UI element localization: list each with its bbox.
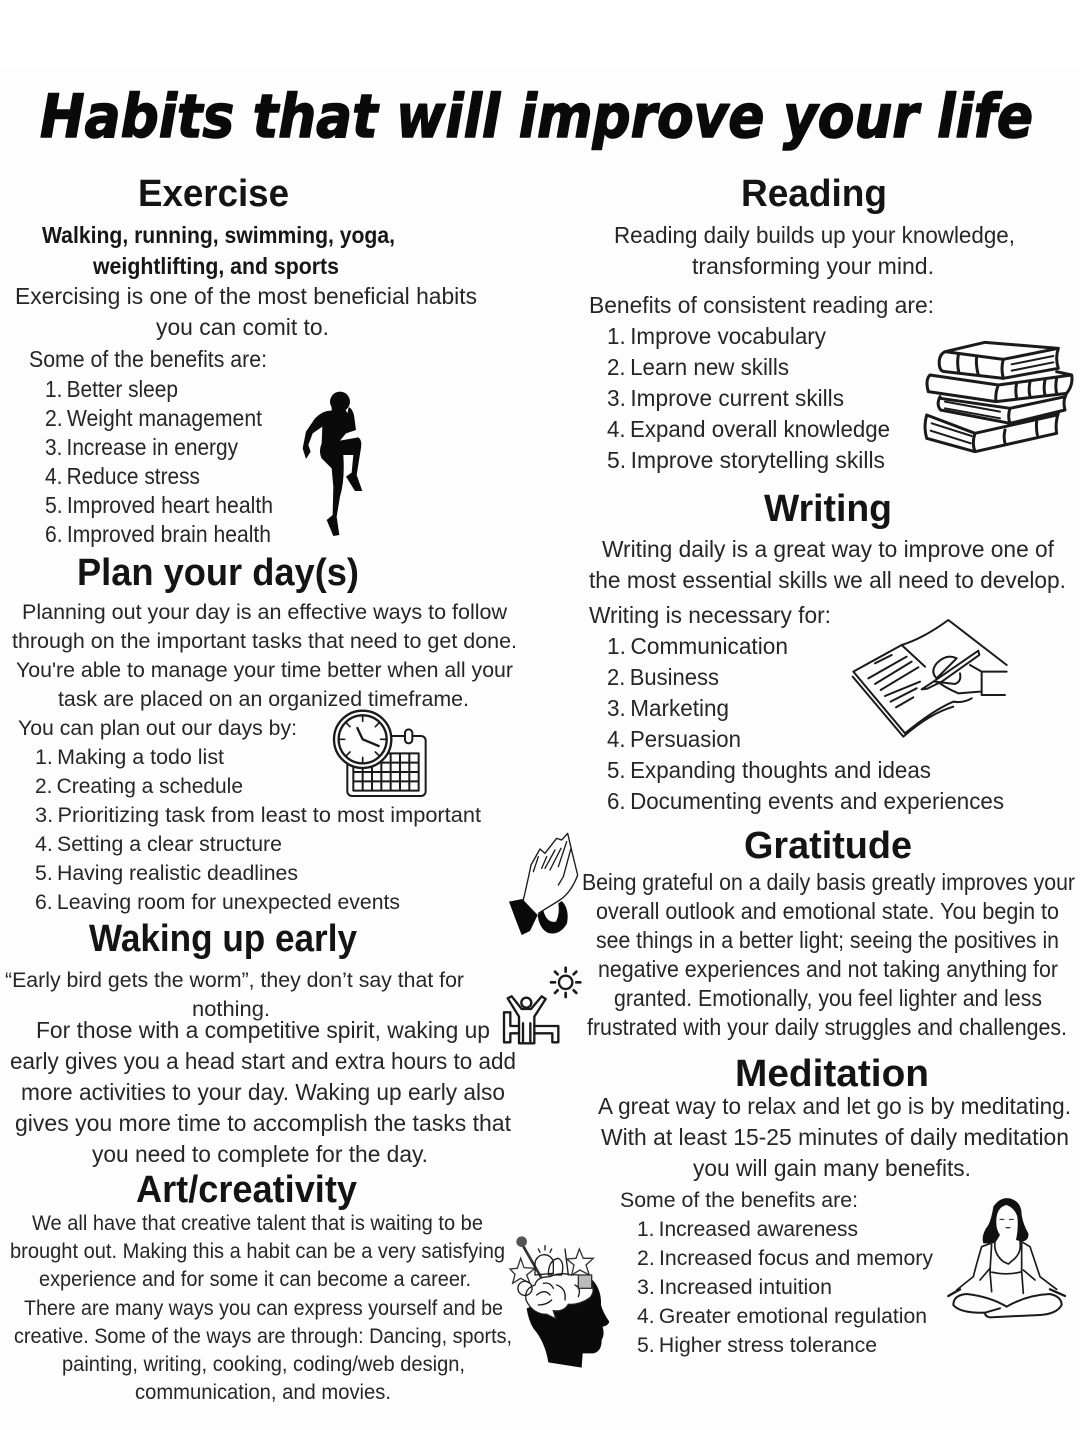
- list: ways to plan: 3. Prioritizing task from least to most important: [35, 804, 481, 827]
- text block: planning intro: Planning out your day is an effective ways to follow: [22, 601, 508, 624]
- list: meditation benefits: 4. Greater emotional regulation: [637, 1305, 927, 1328]
- text block: exercise intro: you can comit to.: [156, 314, 329, 340]
- list: exercise benefits: 6. Improved brain health: [45, 521, 271, 547]
- list: reading benefits: 1. Improve vocabulary: [607, 323, 826, 349]
- icon: sun and person waking in bed: [504, 968, 580, 1043]
- list: reading benefits: 3. Improve current skills: [607, 385, 844, 411]
- icon: praying hands: [509, 833, 578, 935]
- panel: waking up early: [5, 918, 580, 1167]
- icon: runner silhouette: [303, 392, 362, 536]
- icon: stack of books: [925, 342, 1072, 452]
- icon: clock and calendar: [334, 711, 426, 796]
- list: writing uses: 3. Marketing: [607, 695, 729, 721]
- list: ways to plan: 4. Setting a clear structure: [35, 833, 282, 856]
- text block: waking up benefits: more activities to your day. Waking up early also: [21, 1079, 505, 1105]
- list: writing uses: 6. Documenting events and experiences: [607, 788, 1004, 814]
- icon: hand writing in book: [853, 620, 1007, 737]
- text block: meditation intro: With at least 15-25 minutes of daily meditation: [601, 1124, 1069, 1150]
- text block: waking up benefits: For those with a competitive spirit, waking up: [36, 1017, 490, 1043]
- text block: gratitude: overall outlook and emotional state. You begin to: [596, 898, 1059, 924]
- text block: creativity: experience and for some it can become a career.: [39, 1268, 471, 1291]
- list: exercise benefits: 1. Better sleep: [45, 376, 178, 402]
- text block: waking up benefits: early gives you a head start and extra hours to add: [10, 1048, 516, 1074]
- icon: meditating woman: [948, 1198, 1065, 1317]
- list: writing uses: 1. Communication: [607, 633, 788, 659]
- list: reading benefits: [589, 292, 934, 473]
- list: meditation benefits: Some of the benefits are:: [620, 1189, 858, 1212]
- list: meditation benefits: 2. Increased focus and memory: [637, 1247, 934, 1270]
- list: exercise benefits: 3. Increase in energy: [45, 434, 238, 460]
- text block: reading intro: Reading daily builds up your knowledge,: [614, 222, 1015, 248]
- text block: creativity: There are many ways you can express yourself and be: [24, 1297, 503, 1320]
- icon: head with creative brain: [510, 1236, 609, 1368]
- list: ways to plan: [18, 717, 481, 914]
- text block: creativity: creative. Some of the ways are through: Dancing, sports,: [14, 1325, 512, 1348]
- heading: gratitude: Gratitude: [744, 825, 912, 867]
- text block: exercise intro: [15, 222, 477, 340]
- list: meditation benefits: 1. Increased awareness: [637, 1218, 858, 1241]
- list: ways to plan: 2. Creating a schedule: [35, 775, 243, 798]
- panel: reading: [589, 173, 1072, 473]
- text block: reading intro: [614, 222, 1015, 279]
- list: ways to plan: 6. Leaving room for unexpected events: [35, 891, 400, 914]
- text block: waking up benefits: [10, 1017, 516, 1167]
- panel: art and creativity: [10, 1169, 609, 1404]
- text block: creativity: communication, and movies.: [135, 1381, 391, 1404]
- list: meditation benefits: 5. Higher stress tolerance: [637, 1334, 877, 1357]
- text block: early bird quote: nothing.: [192, 998, 270, 1021]
- list: exercise benefits: 4. Reduce stress: [45, 463, 200, 489]
- text block: gratitude: [582, 869, 1075, 1040]
- list: exercise benefits: Some of the benefits are:: [29, 346, 267, 372]
- text block: planning intro: [12, 601, 517, 711]
- list: ways to plan: You can plan out our days by:: [18, 717, 297, 740]
- list: exercise benefits: 2. Weight management: [45, 405, 263, 431]
- text block: creativity: [10, 1212, 512, 1404]
- text block: planning intro: task are placed on an organized timeframe.: [58, 688, 469, 711]
- text block: planning intro: through on the important tasks that need to get done.: [12, 630, 517, 653]
- list: reading benefits: 5. Improve storytelling skills: [607, 447, 885, 473]
- panel: writing: [589, 488, 1066, 814]
- text block: gratitude: negative experiences and not taking anything for: [598, 956, 1058, 982]
- list: exercise benefits: 5. Improved heart health: [45, 492, 273, 518]
- text block: writing intro: [589, 536, 1066, 593]
- text block: exercise intro: weightlifting, and sports: [92, 253, 339, 279]
- text block: writing intro: Writing daily is a great way to improve one of: [602, 536, 1055, 562]
- panel: meditation: [598, 1053, 1071, 1357]
- text block: early bird quote: “Early bird gets the worm”, they don’t say that for: [5, 969, 464, 992]
- list: reading benefits: Benefits of consistent reading are:: [589, 292, 934, 318]
- text block: exercise intro: Walking, running, swimming, yoga,: [42, 222, 395, 248]
- list: writing uses: 5. Expanding thoughts and ideas: [607, 757, 931, 783]
- panel: exercise: [15, 173, 477, 547]
- text block: exercise intro: Exercising is one of the most beneficial habits: [15, 283, 477, 309]
- list: reading benefits: 2. Learn new skills: [607, 354, 789, 380]
- text block: meditation intro: you will gain many benefits.: [693, 1155, 971, 1181]
- list: ways to plan: 1. Making a todo list: [35, 746, 224, 769]
- text block: creativity: brought out. Making this a habit can be a very satisfying: [10, 1240, 505, 1263]
- text block: meditation intro: A great way to relax and let go is by meditating.: [598, 1093, 1071, 1119]
- panel: gratitude: [509, 825, 1075, 1040]
- list: meditation benefits: [620, 1189, 934, 1357]
- text block: creativity: We all have that creative talent that is waiting to be: [32, 1212, 483, 1235]
- list: meditation benefits: 3. Increased intuition: [637, 1276, 832, 1299]
- text block: gratitude: granted. Emotionally, you feel lighter and less: [614, 985, 1042, 1011]
- text block: early bird quote: [5, 969, 464, 1021]
- heading: reading: Reading: [741, 173, 887, 215]
- panel: plan your days: [12, 552, 517, 914]
- list: writing uses: [589, 602, 1004, 814]
- list: writing uses: 2. Business: [607, 664, 719, 690]
- list: reading benefits: 4. Expand overall knowledge: [607, 416, 890, 442]
- list: exercise benefits: [29, 346, 273, 547]
- text block: reading intro: transforming your mind.: [692, 253, 934, 279]
- heading: plan your days: Plan your day(s): [77, 552, 359, 594]
- text block: writing intro: the most essential skills we all need to develop.: [589, 567, 1066, 593]
- heading: exercise: Exercise: [138, 173, 289, 215]
- heading: waking up early: Waking up early: [89, 918, 357, 960]
- heading: art and creativity: Art/creativity: [136, 1169, 357, 1211]
- list: ways to plan: 5. Having realistic deadlines: [35, 862, 298, 885]
- text block: waking up benefits: gives you more time to accomplish the tasks that: [15, 1110, 512, 1136]
- heading: meditation: Meditation: [735, 1053, 929, 1095]
- text block: meditation intro: [598, 1093, 1071, 1181]
- text block: waking up benefits: you need to complete for the day.: [92, 1141, 428, 1167]
- text block: planning intro: You're able to manage your time better when all your: [16, 659, 513, 682]
- text block: creativity: painting, writing, cooking, coding/web design,: [62, 1353, 465, 1376]
- list: writing uses: 4. Persuasion: [607, 726, 741, 752]
- list: writing uses: Writing is necessary for:: [589, 602, 831, 628]
- heading: writing: Writing: [764, 488, 892, 530]
